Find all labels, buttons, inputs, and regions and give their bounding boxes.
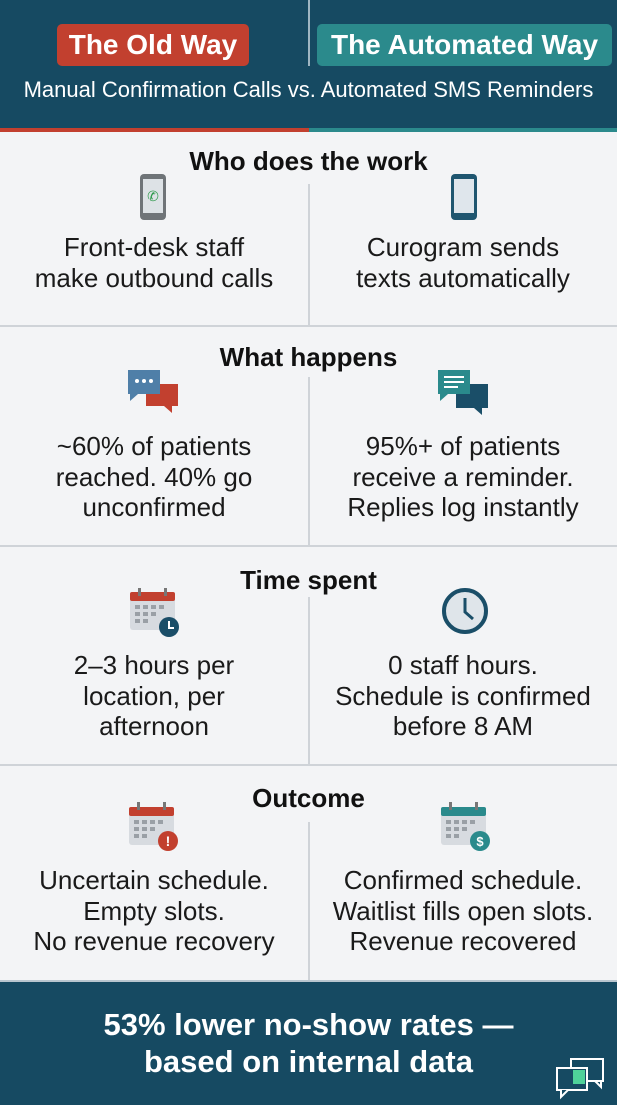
section: time spent: Time spent	[240, 565, 377, 595]
text: old	[33, 865, 275, 956]
icon: calendar alert	[129, 802, 178, 851]
text: old	[56, 431, 252, 522]
text: new	[347, 431, 579, 522]
section: what happens	[56, 342, 579, 545]
text: old: 2–3 hours per	[74, 650, 234, 680]
text: old: reached. 40% go	[56, 462, 252, 492]
text: old: Front-desk staff	[64, 232, 244, 262]
icon: calendar alert: !	[166, 833, 170, 849]
text: new: before 8 AM	[393, 711, 533, 741]
text: new: Schedule is confirmed	[335, 680, 591, 710]
text: new	[332, 865, 593, 956]
footer stat text: based on internal data	[144, 1044, 473, 1079]
subtitle: Manual Confirmation Calls vs. Automated SMS Reminders	[24, 77, 593, 102]
icon: chat logo	[556, 1058, 604, 1100]
text: new: 0 staff hours.	[388, 650, 538, 680]
text: new: texts automatically	[356, 262, 570, 292]
icon: smartphone	[451, 174, 477, 220]
badge: automated way	[317, 24, 612, 66]
icon: old phone: ✆	[147, 188, 159, 204]
text: old	[74, 650, 234, 741]
text: new	[335, 650, 591, 741]
text: old: Empty slots.	[83, 896, 225, 926]
text: new	[356, 232, 570, 292]
icon: calendar clock	[130, 588, 179, 637]
footer	[0, 980, 617, 1105]
badge: old way: The Old Way	[69, 29, 237, 60]
footer stat text: 53% lower no-show rates —	[104, 1007, 514, 1042]
header	[0, 0, 617, 128]
text: old: No revenue recovery	[33, 926, 275, 956]
text: old: make outbound calls	[35, 262, 273, 292]
text: new: Confirmed schedule.	[344, 865, 582, 895]
badge: old way	[57, 24, 249, 66]
icon: old phone	[140, 174, 166, 220]
section: outcome	[33, 783, 593, 980]
text: new: 95%+ of patients	[366, 431, 560, 461]
section: who does the work	[35, 146, 570, 325]
text: new: Replies log instantly	[347, 492, 579, 522]
section: what happens: What happens	[220, 342, 397, 372]
badge: automated way: The Automated Way	[331, 29, 598, 60]
section: who does the work: Who does the work	[189, 146, 428, 176]
icon: calendar dollar: $	[476, 834, 484, 849]
text: old: Uncertain schedule.	[39, 865, 269, 895]
text: old: ~60% of patients	[57, 431, 251, 461]
text: old: unconfirmed	[82, 492, 226, 522]
section: outcome: Outcome	[252, 783, 365, 813]
icon: chat bubbles new	[438, 370, 488, 415]
icon: clock	[442, 588, 488, 634]
section: time spent	[74, 565, 591, 764]
icon: calendar dollar	[441, 802, 490, 851]
text: new: Revenue recovered	[350, 926, 576, 956]
text: old	[35, 232, 273, 292]
text: old: location, per	[83, 680, 225, 710]
text: old: afternoon	[99, 711, 209, 741]
icon: chat bubbles old	[128, 370, 178, 413]
footer stat text	[104, 1007, 514, 1079]
text: new: receive a reminder.	[352, 462, 574, 492]
text: new: Waitlist fills open slots.	[333, 896, 593, 926]
text: new: Curogram sends	[367, 232, 559, 262]
